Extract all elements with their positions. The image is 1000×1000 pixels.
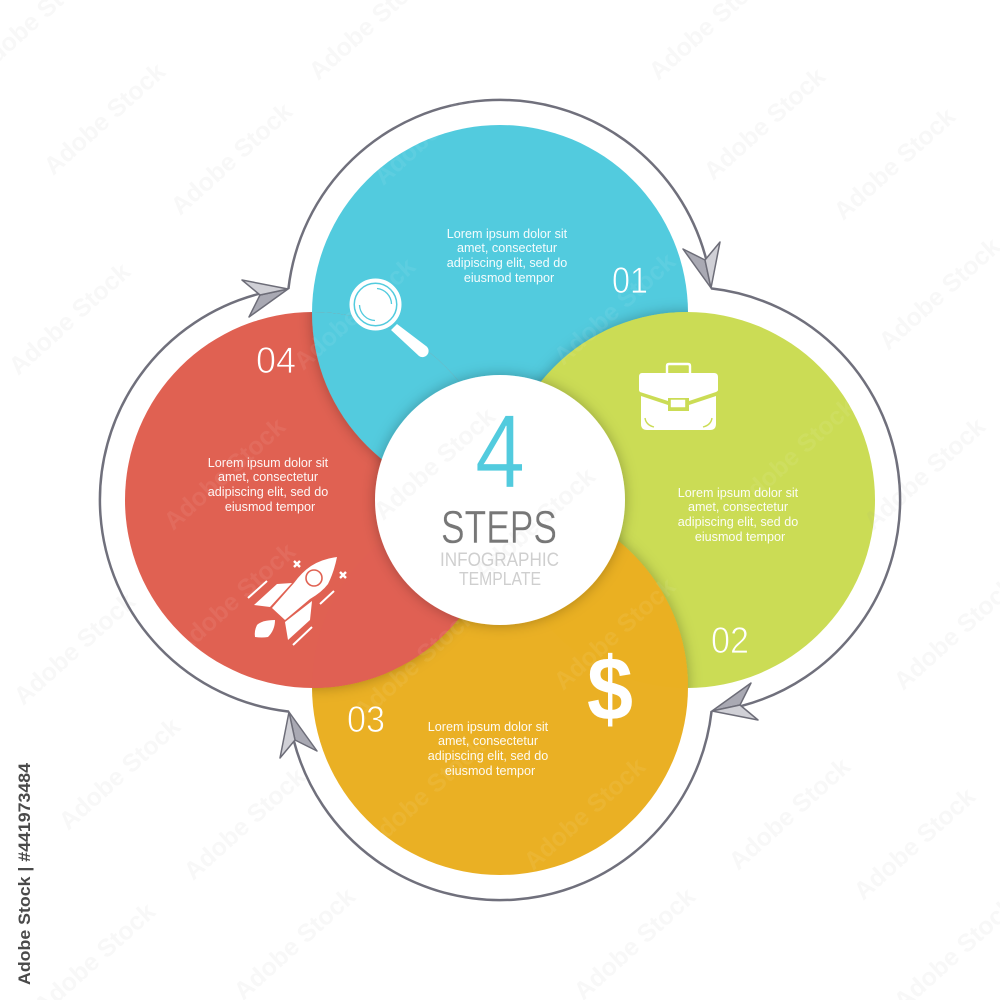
text block: step 03: adipiscing elit, sed do (428, 749, 548, 763)
panel: step 01 blue circle (312, 125, 688, 501)
icon: rocket (248, 557, 346, 645)
text block: step 01: eiusmod tempor (464, 271, 554, 285)
text block: step 04: Lorem ipsum dolor sit (208, 456, 329, 470)
watermark: Adobe Stock (4, 257, 136, 381)
stock credit: Adobe Stock | #441973484 (15, 762, 34, 985)
overlap: blue over red (304, 312, 459, 466)
watermark: Adobe Stock (549, 572, 681, 696)
watermark: Adobe Stock (469, 462, 601, 586)
number: 03: 03 (347, 699, 385, 740)
panel: step 03 orange circle (312, 499, 688, 875)
text block: step 03 (428, 720, 549, 778)
text block: step 04 (208, 456, 329, 514)
text block: step 04: eiusmod tempor (225, 500, 315, 514)
center white circle (375, 375, 625, 625)
watermark: Adobe Stock (369, 67, 501, 191)
outer arc with arrow: bottom (280, 711, 712, 900)
overlap: green over blue (534, 304, 688, 382)
number: 04: 04 (256, 340, 296, 381)
text block: step 01: adipiscing elit, sed do (447, 256, 567, 270)
watermark: Adobe Stock (159, 412, 291, 536)
text block: step 02 (678, 486, 799, 544)
watermark: Adobe Stock (169, 537, 301, 661)
text block: step 01: amet, consectetur (457, 241, 557, 255)
watermark: Adobe Stock (699, 62, 831, 186)
icon: dollar sign: $ (587, 640, 633, 740)
outer arc with arrow: top (288, 100, 720, 289)
center title: number 4: 4 (475, 394, 525, 510)
watermark: Adobe Stock (849, 782, 981, 906)
text block: step 01 (447, 227, 568, 285)
watermark: Adobe Stock (9, 587, 141, 711)
watermark: Adobe Stock (39, 57, 171, 181)
text block: step 02: adipiscing elit, sed do (678, 515, 798, 529)
watermark: Adobe Stock (289, 252, 421, 376)
watermark: Adobe Stock (729, 392, 861, 516)
text block: step 04: adipiscing elit, sed do (208, 485, 328, 499)
center title: STEPS: STEPS (441, 501, 557, 553)
icon: briefcase (639, 364, 718, 430)
text block: step 03: amet, consectetur (438, 734, 538, 748)
watermark: Adobe Stock (519, 752, 651, 876)
watermark: Adobe Stock (349, 602, 481, 726)
watermark: Adobe Stock (859, 412, 991, 536)
watermark: Adobe Stock (166, 97, 298, 221)
watermark: Adobe Stock (724, 752, 856, 876)
center subtitle: INFOGRAPHIC: INFOGRAPHIC (440, 549, 559, 571)
watermark: Adobe Stock (54, 712, 186, 836)
text block: step 04: amet, consectetur (218, 470, 318, 484)
number: 02: 02 (711, 620, 749, 661)
text block: step 02: eiusmod tempor (695, 530, 785, 544)
watermark: Adobe Stock (359, 732, 491, 856)
watermark: Adobe Stock (179, 762, 311, 886)
outer arc with arrow: right (711, 288, 900, 720)
overlap: red over orange (312, 618, 466, 696)
center subtitle: TEMPLATE: TEMPLATE (459, 568, 541, 589)
watermark: Adobe Stock (829, 102, 961, 226)
watermark: Adobe Stock (369, 402, 501, 526)
text block: step 02: Lorem ipsum dolor sit (678, 486, 799, 500)
icon: magnifying glass (352, 280, 429, 357)
number: 01: 01 (612, 260, 648, 301)
panel: step 02 green circle (499, 312, 875, 688)
overlap: orange over green (618, 534, 696, 688)
panel: step 04 red circle (125, 312, 501, 688)
text block: step 01: Lorem ipsum dolor sit (447, 227, 568, 241)
text block: step 03: eiusmod tempor (445, 764, 535, 778)
watermark: Adobe Stock (549, 247, 681, 371)
text block: step 03: Lorem ipsum dolor sit (428, 720, 549, 734)
text block: step 02: amet, consectetur (688, 500, 788, 514)
outer arc with arrow: left (100, 280, 289, 712)
